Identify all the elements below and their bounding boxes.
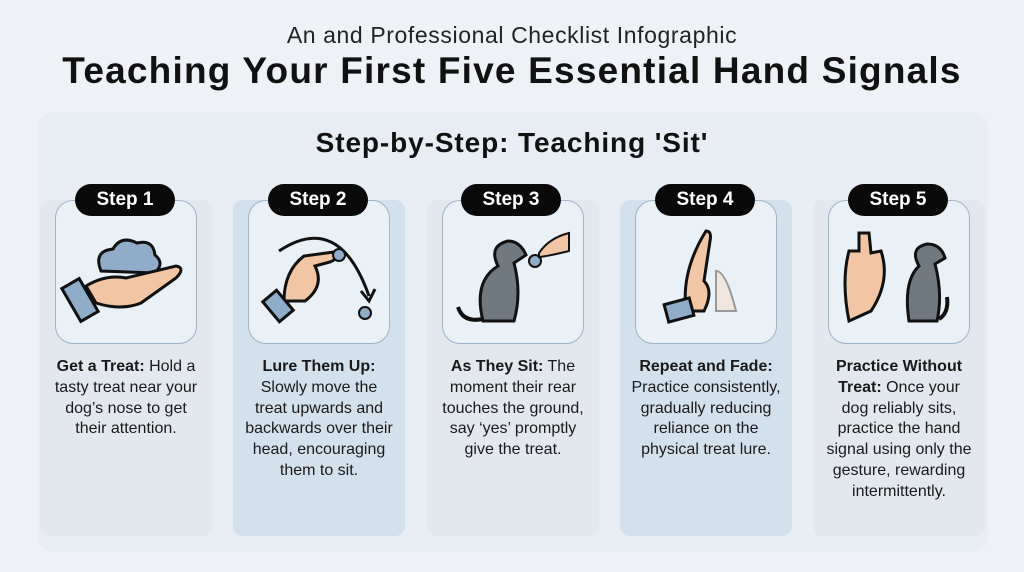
icon box 3 [442, 200, 584, 344]
step pill 3: Step 3 [482, 189, 540, 210]
section heading: Step-by-Step: Teaching 'Sit' [316, 127, 708, 158]
subtitle: An and Professional Checklist Infographic [287, 22, 737, 48]
step pill 1 [75, 184, 175, 216]
text 1: Get a Treat: Hold a tasty treat near your dog’s nose to get their attention. [55, 358, 197, 437]
step pill 2: Step 2 [289, 189, 347, 210]
text 2: Lure Them Up: Slowly move the treat upwards and backwards over their head, encouraging them to sit. [245, 358, 393, 479]
step pill 5: Step 5 [869, 189, 927, 210]
panel: steps [38, 112, 988, 552]
column 5 [813, 200, 985, 536]
column 1 [40, 200, 212, 536]
column 4 [620, 200, 792, 536]
title: Teaching Your First Five Essential Hand Signals [62, 50, 962, 91]
icon box 5 [828, 200, 970, 344]
text 5: Practice Without Treat: Once your dog reliably sits, practice the hand signal using only the gesture, rewarding intermittently. [826, 358, 971, 500]
step pill 4 [655, 184, 755, 216]
step pill 2 [268, 184, 368, 216]
step pill 1: Step 1 [96, 189, 154, 210]
column 3 [427, 200, 599, 536]
icon box 2 [248, 200, 390, 344]
step pill 5 [848, 184, 948, 216]
text 4: Repeat and Fade: Practice consistently, gradually reducing reliance on the physical treat lure. [631, 358, 781, 458]
column 2 [233, 200, 405, 536]
icon box 1 [55, 200, 197, 344]
step pill 3 [461, 184, 561, 216]
step pill 4: Step 4 [676, 189, 734, 210]
text 3: As They Sit: The moment their rear touches the ground, say ‘yes’ promptly give the treat. [442, 358, 584, 458]
icon box 4 [635, 200, 777, 344]
